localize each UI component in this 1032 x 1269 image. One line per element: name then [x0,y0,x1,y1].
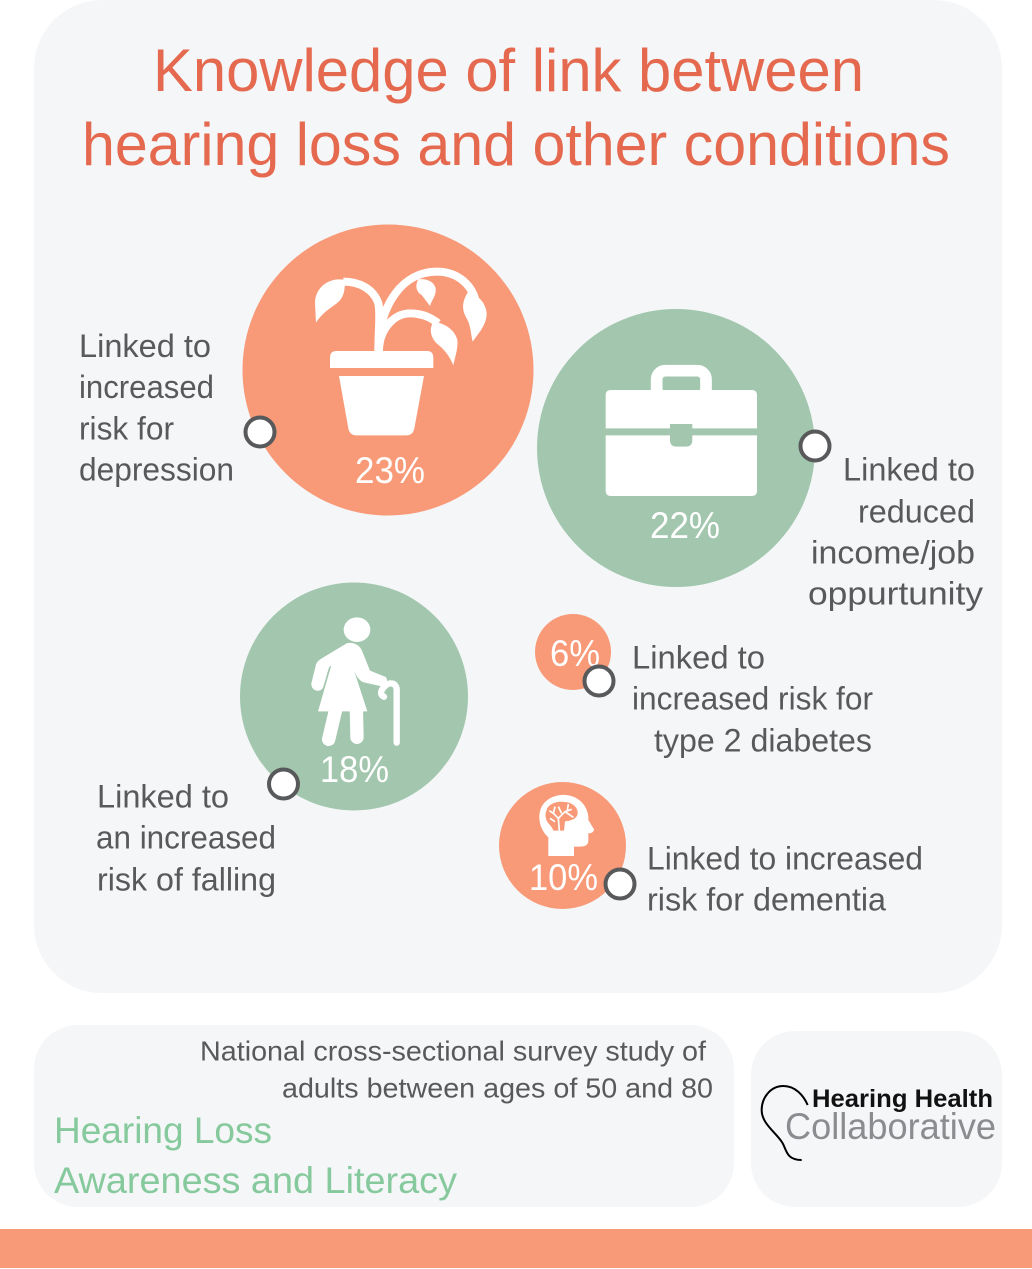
marker: falling [269,770,298,798]
label: depression: increased [79,369,214,405]
circle: falling 18% [240,582,468,810]
label: diabetes [632,640,873,758]
label: income: Linked to [843,452,975,488]
icon: elderly woman with cane [311,617,397,743]
text: study description: adults between ages of 50 and 80 [282,1072,713,1104]
label: falling: risk of falling [97,862,276,898]
circle: diabetes 6% [535,614,611,690]
label: falling: an increased [96,820,276,856]
label: income [808,452,983,612]
logo text: Collaborative: Collaborative [785,1106,996,1147]
title [82,37,950,178]
text: study description: National cross-sectional survey study of [200,1036,706,1066]
panel: main [34,0,1002,993]
title: Knowledge of link between [153,37,864,104]
panel: study note [34,1025,734,1207]
label: depression: Linked to [79,328,211,364]
circle: depression 23% [242,224,534,516]
label: diabetes: Linked to [632,640,765,676]
label: income: reduced [858,494,975,530]
heading: topic: Hearing Loss [54,1110,272,1151]
label: depression [79,328,234,488]
label: income: oppurtunity [808,576,983,612]
circle: income 22% [537,309,815,587]
label: dementia [647,840,923,918]
heading: topic [54,1110,458,1201]
logo text: Hearing Health: Hearing Health [812,1085,993,1113]
marker: diabetes [584,666,614,696]
icon: head with brain [539,795,594,856]
icon: briefcase [606,371,757,496]
label: income: income/job [811,534,975,570]
label: depression: depression [79,452,234,488]
title: hearing loss and other conditions [82,111,950,178]
marker: depression [246,418,274,446]
percentage: 22%: 22% [650,505,720,546]
percentage: 23%: 23% [355,450,425,491]
percentage: 6%: 6% [550,633,600,674]
marker: income [800,432,830,460]
label: dementia: risk for dementia [647,882,886,918]
label: diabetes: type 2 diabetes [654,722,872,758]
label: falling: Linked to [97,778,229,814]
marker: dementia [606,870,634,898]
heading: topic: Awareness and Literacy [54,1160,458,1201]
label: diabetes: increased risk for [632,680,873,716]
icon: ear outline [762,1086,808,1160]
percentage: 10%: 10% [529,857,598,898]
percentage: 18%: 18% [320,749,389,790]
text: study description [200,1036,713,1104]
label: depression: risk for [79,410,174,446]
footer bar [0,1229,1032,1268]
panel: logo [751,1031,1002,1207]
label: dementia: Linked to increased [647,840,923,876]
label: falling [96,778,276,898]
icon: wilting plant [315,272,487,435]
circle: dementia 10% [499,782,626,909]
